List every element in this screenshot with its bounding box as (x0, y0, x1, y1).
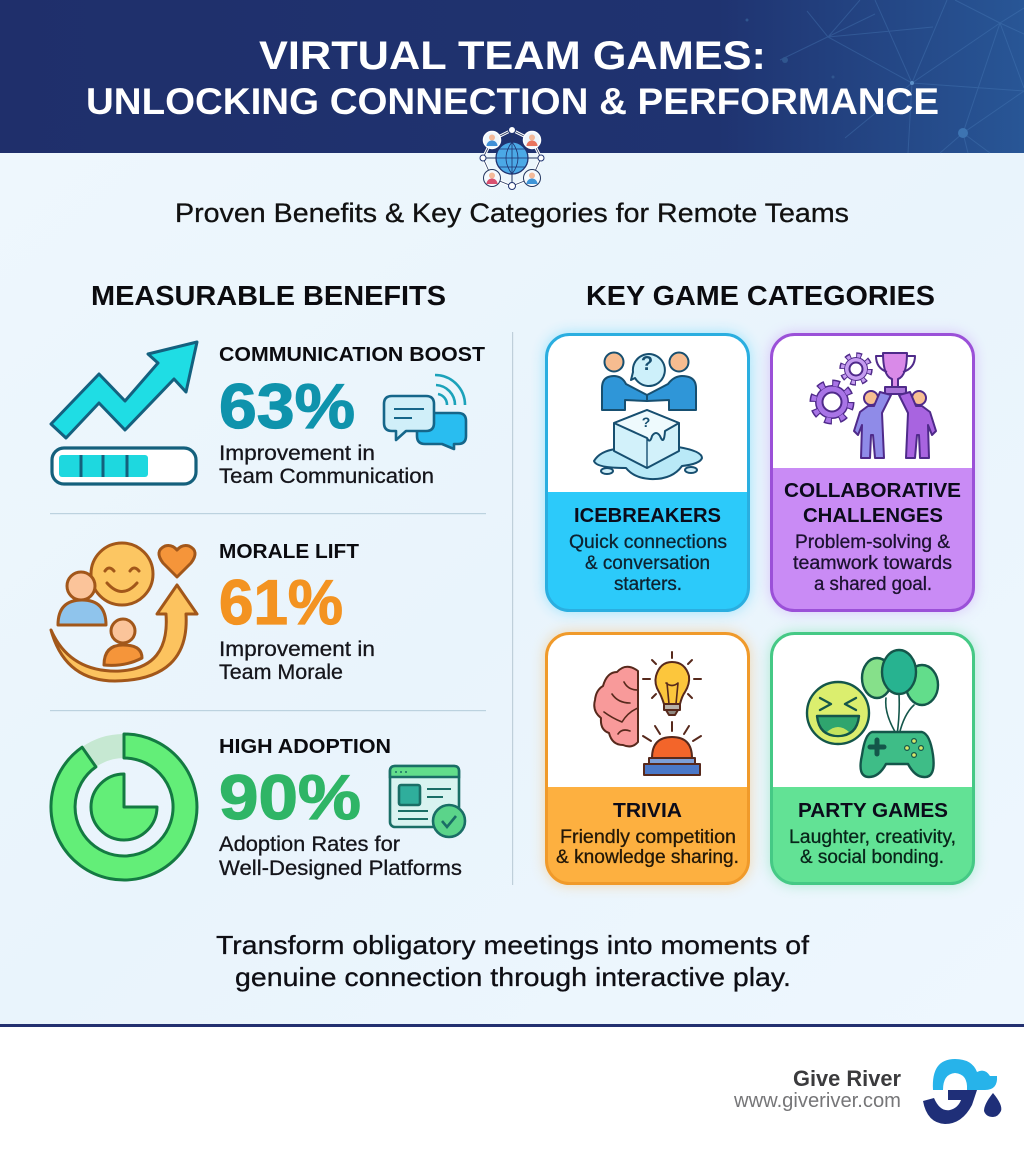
description: trivia: & knowledge sharing. (556, 847, 739, 868)
label: trivia: TRIVIA (613, 800, 682, 822)
closing statement (216, 930, 810, 992)
panel: communication boost (51, 342, 485, 488)
header banner (0, 0, 1024, 153)
icon: morale people and arrow (51, 543, 197, 681)
description: icebreakers: & conversation (585, 553, 710, 574)
label: communication boost: COMMUNICATION BOOST (219, 344, 485, 366)
label: collaborative challenges: CHALLENGES (803, 505, 943, 527)
description: trivia (556, 827, 739, 868)
label: icebreakers: ICEBREAKERS (574, 505, 721, 527)
icon: progress bar (52, 448, 196, 484)
description: adoption: Adoption Rates for (219, 833, 400, 856)
description: collaborative: Problem-solving & (795, 532, 950, 553)
icon: donut chart (51, 734, 197, 880)
card: trivia (545, 632, 750, 885)
brand name: Give River (793, 1066, 901, 1091)
closing statement: genuine connection through interactive play. (235, 962, 791, 992)
panel: morale lift: Team Morale (219, 661, 343, 684)
stat: 90%: 90% (219, 763, 361, 833)
label: collaborative challenges (784, 480, 961, 527)
website: www.giveriver.com (733, 1090, 901, 1112)
description: icebreakers (569, 532, 727, 595)
panel: morale lift (51, 541, 375, 684)
icon labels: question marks: ? (642, 414, 650, 430)
label: high adoption: HIGH ADOPTION (219, 736, 391, 758)
page background (0, 153, 1024, 1025)
icon: emoji, balloons and controller (807, 650, 938, 777)
closing statement: Transform obligatory meetings into moments of (216, 930, 810, 960)
description: morale: Improvement in (219, 638, 375, 661)
title (86, 34, 939, 122)
description: icebreakers: starters. (614, 574, 682, 595)
icon labels: question marks (641, 353, 653, 430)
icon labels: question marks: ? (641, 353, 653, 375)
heading: key game categories: KEY GAME CATEGORIES (586, 280, 935, 311)
description: icebreakers: Quick connections (569, 532, 727, 553)
panel: high adoption (51, 734, 465, 880)
description: communication: Improvement in (219, 442, 375, 465)
icon: brain, bulb and buzzer (594, 652, 701, 775)
panel: high adoption: Well-Designed Platforms (219, 857, 462, 880)
card: party games (770, 632, 975, 885)
subtitle: Proven Benefits & Key Categories for Remote Teams (175, 198, 849, 228)
card: collaborative challenges (770, 333, 975, 612)
icon: globe network (480, 126, 544, 190)
label: party games: PARTY GAMES (798, 800, 948, 822)
logo (923, 1059, 1001, 1124)
stat: 63%: 63% (219, 372, 355, 442)
heading: measurable benefits: MEASURABLE BENEFITS (91, 280, 446, 311)
description: party games: Laughter, creativity, (789, 827, 956, 848)
title: VIRTUAL TEAM GAMES: (259, 34, 766, 78)
stat: 61%: 61% (219, 568, 343, 638)
description: party games (789, 827, 956, 868)
description: collaborative (793, 532, 952, 595)
icon: rising arrow (51, 342, 197, 438)
description: trivia: Friendly competition (560, 827, 736, 848)
icon: gears, trophy and team (814, 353, 936, 458)
description: collaborative: a shared goal. (814, 574, 932, 595)
card: icebreakers (545, 333, 750, 612)
icon: chat bubbles (384, 375, 466, 449)
description: party games: & social bonding. (800, 847, 944, 868)
panel: communication boost: Team Communication (219, 465, 434, 488)
footer (0, 1024, 1024, 1154)
label: collaborative challenges: COLLABORATIVE (784, 480, 961, 502)
label: morale lift: MORALE LIFT (219, 541, 359, 563)
description: collaborative: teamwork towards (793, 553, 952, 574)
icon: browser with check (390, 766, 465, 837)
title: UNLOCKING CONNECTION & PERFORMANCE (86, 81, 939, 122)
icon: handshake and ice cube (594, 352, 702, 479)
